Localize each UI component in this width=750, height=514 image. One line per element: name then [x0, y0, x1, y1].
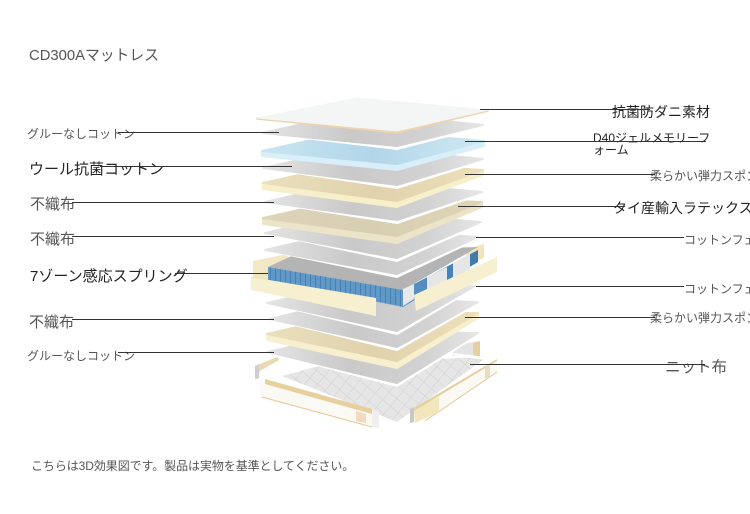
layer: antibacterial anti-mite top fabric: [257, 98, 488, 133]
left labels: [27, 127, 292, 363]
label: Thai imported latex: タイ産輸入ラテックス: [613, 200, 750, 216]
layer: upper cotton felt: [265, 229, 478, 277]
layer: glue-free cotton: [262, 112, 483, 149]
label: wool antibacterial cotton: ウール抗菌コットン: [29, 161, 164, 178]
label: D40 gel memory foam: D40ジェルメモリーフ: [593, 131, 710, 145]
label: knit fabric: ニット布: [665, 358, 727, 376]
layer: bottom soft elastic sponge: [267, 313, 478, 368]
mattress exploded diagram: [251, 98, 497, 428]
layer: knit base and frame: [255, 341, 497, 428]
right labels: [458, 104, 750, 376]
layer: upper soft elastic sponge: [263, 162, 483, 207]
layer: lower non-woven fabric: [270, 298, 478, 350]
label: 7-zone spring: 7ゾーン感応スプリング: [30, 268, 188, 285]
layer: bottom glue-free cotton: [268, 331, 478, 386]
layer: non-woven fabric 2: [265, 181, 482, 223]
layer: D40 gel memory foam: [262, 130, 484, 170]
label: non-woven fabric 3: 不織布: [29, 314, 74, 331]
layer: lower cotton felt: [267, 282, 475, 334]
layer: non-woven fabric 3: [265, 212, 481, 261]
label: glue-free cotton lower: グルーなしコットン: [27, 349, 135, 363]
label: non-woven fabric 1: 不織布: [30, 196, 75, 213]
footnote: こちらは3D効果図です。製品は実物を基準としてください。: [31, 458, 354, 473]
label: non-woven fabric 2: 不織布: [30, 231, 75, 248]
label: antibacterial anti-mite material: 抗菌防ダニ素材: [612, 104, 710, 120]
layer: wool antibacterial cotton: [263, 147, 483, 188]
layer: spring frame: [251, 257, 497, 316]
title: CD300Aマットレス: [29, 47, 159, 64]
layer: 7-zone pocket spring: [253, 244, 484, 307]
label: D40 gel memory foam: ォーム: [593, 143, 629, 157]
label: glue-free cotton: グルーなしコットン: [27, 127, 135, 141]
label: D40 gel memory foam: [465, 131, 710, 157]
layer: latex: [263, 197, 482, 243]
